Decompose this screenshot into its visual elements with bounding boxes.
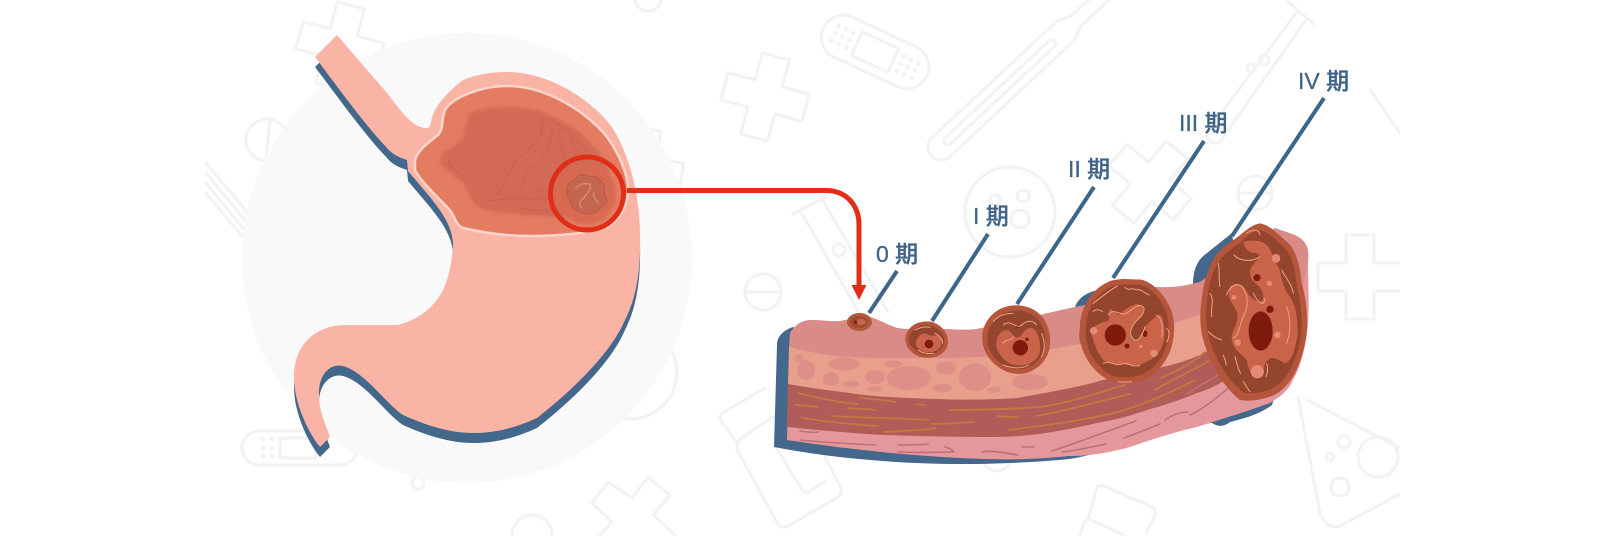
tumour highlight <box>576 184 598 208</box>
tumour stage IV <box>1200 223 1307 401</box>
stage label: II: II 期 <box>1068 156 1110 182</box>
serosa lines <box>800 368 1232 455</box>
stomach wall cross-section <box>774 98 1324 464</box>
stomach inner fold area <box>440 107 611 217</box>
infographic canvas <box>205 0 1400 536</box>
wall shadow <box>774 233 1275 464</box>
stage label: III: III 期 <box>1179 110 1228 136</box>
red arrow from stomach to staging diagram <box>627 190 866 300</box>
submucosa layer <box>788 312 1215 400</box>
stage label: 0: 0 期 <box>876 241 918 267</box>
red magnifier circle <box>550 157 624 230</box>
tumour patch <box>556 164 616 224</box>
stomach body <box>294 35 640 447</box>
tumour stage 0 <box>847 313 872 331</box>
background medical icon pattern <box>205 0 1402 535</box>
tumour stage II <box>982 305 1050 374</box>
stomach shadow <box>294 45 640 457</box>
stomach illustration <box>294 35 640 457</box>
submucosa blobs <box>795 354 1048 393</box>
tumour stage I <box>905 321 948 358</box>
early tumour on stomach wall <box>566 175 607 214</box>
leader lines <box>869 98 1324 321</box>
muscle fibres <box>795 352 1210 432</box>
tumour stage III <box>1079 279 1174 383</box>
mucosa layer <box>789 228 1308 358</box>
stage label: I: I 期 <box>973 203 1009 229</box>
stomach inner lining <box>415 86 628 236</box>
stage label: IV: IV 期 <box>1298 68 1349 94</box>
bottom layer <box>787 228 1309 459</box>
stomach fold wrinkles <box>448 118 588 210</box>
muscle layer <box>787 348 1228 437</box>
grey background circle behind stomach <box>242 33 692 483</box>
